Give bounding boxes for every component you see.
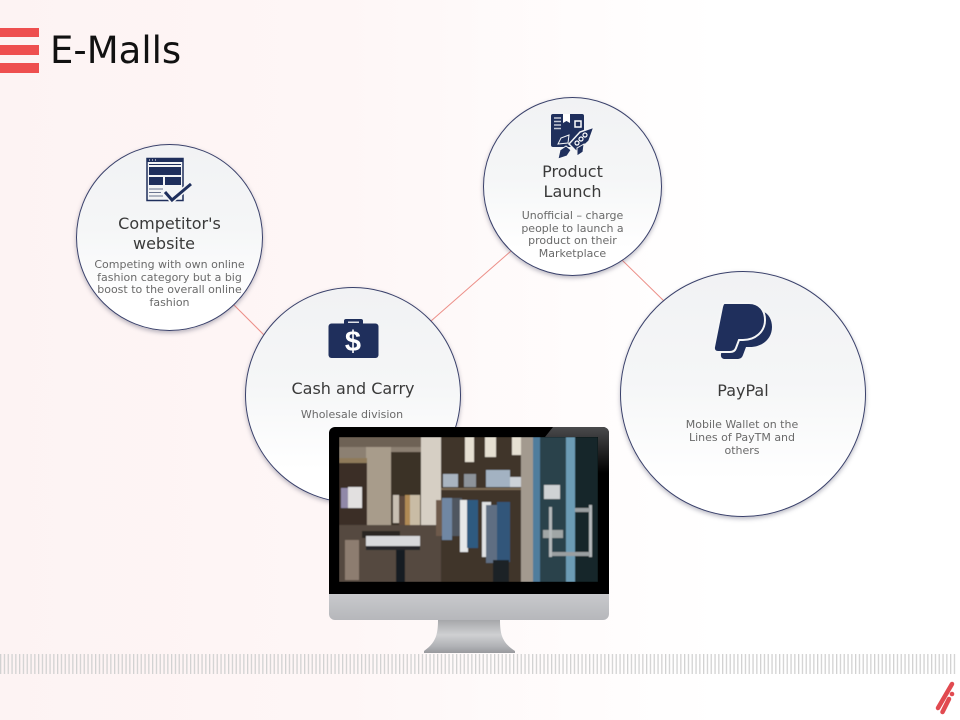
- description: fashion: [149, 296, 190, 309]
- description: [521, 209, 624, 260]
- icon: box and rocket: [551, 114, 593, 158]
- heading: website: [133, 234, 195, 252]
- description: Mobile Wallet on the: [686, 418, 798, 431]
- heading: [542, 162, 603, 200]
- description: Unofficial – charge: [522, 209, 623, 222]
- heading: Launch: [544, 182, 601, 200]
- stand: [424, 620, 515, 653]
- heading: Competitor's: [118, 214, 221, 233]
- logo mark: [936, 682, 954, 714]
- heading: PayPal: [717, 381, 769, 400]
- panel: paypal: [618, 270, 868, 522]
- panel: competitor's website: [74, 144, 266, 336]
- description: [686, 418, 798, 457]
- description: boost to the overall online: [97, 283, 242, 296]
- description: product on their: [528, 234, 617, 247]
- heading: Cash and Carry: [291, 379, 415, 398]
- monitor body: [329, 594, 609, 620]
- description: Wholesale division: [301, 408, 403, 421]
- monitor with store photo: [329, 427, 609, 653]
- description: fashion category but a big: [97, 271, 242, 284]
- panel: cash and carry: [242, 286, 464, 504]
- description: Competing with own online: [94, 258, 245, 271]
- description: Marketplace: [539, 247, 606, 260]
- store photo: [339, 437, 598, 582]
- heading: [118, 214, 221, 252]
- icon: web page with check: [146, 158, 192, 202]
- heading: Product: [542, 162, 603, 181]
- hatched band: [0, 654, 956, 674]
- icon: paypal: [714, 304, 772, 359]
- icon: dollar briefcase: [328, 319, 378, 358]
- description: people to launch a: [521, 222, 624, 235]
- description: Lines of PayTM and: [689, 431, 795, 444]
- title: E-Malls: [50, 29, 181, 72]
- description: [94, 258, 245, 309]
- title icon: red bars: [0, 28, 39, 73]
- description: others: [724, 444, 760, 457]
- icon: dollar briefcase: $: [345, 326, 361, 358]
- panel: product launch: [480, 96, 664, 280]
